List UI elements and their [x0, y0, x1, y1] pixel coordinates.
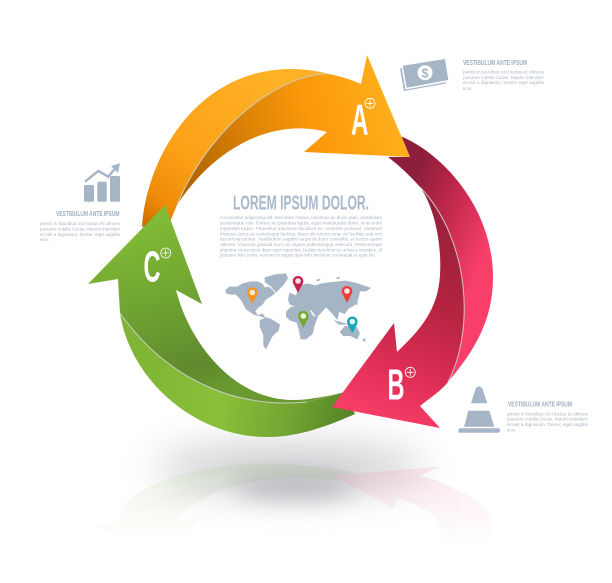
floor shadow	[155, 444, 425, 497]
center paragraph	[220, 215, 383, 258]
top right text block: primis in faucibus orci luctus et ultrices	[463, 69, 545, 74]
letter B with plus: B	[388, 360, 404, 409]
letter A with plus: A	[351, 95, 368, 144]
top right text block	[463, 58, 545, 91]
top right text block: VESTIBULUM ANTE IPSUM	[463, 58, 527, 67]
center paragraph: pharetra consectetur diam eget imperdiet. Nullam hendrerit ex ut lacus interdum, id	[220, 247, 382, 252]
infographic canvas	[40, 55, 588, 522]
bottom right text block: posuere cubilia Curae; Mauris interdum	[507, 416, 588, 422]
map pin A	[247, 287, 258, 304]
center paragraph: accumsan purus. Vestibulum sagittis turpis id dolor convallis, et luctus quam	[220, 237, 382, 242]
bottom right text block: et nisl a dignissim. Donec eget sagittis	[507, 422, 589, 427]
bottom right text block: VESTIBULUM ANTE IPSUM	[508, 400, 572, 409]
center paragraph: posuere felis porta. Aenean et augue quis felis tincidunt consequat ut eget leo.	[220, 253, 376, 258]
center paragraph: ultrices. Vivamus gravida nunc ac sapien pellentesque vehicula. Pellentesque	[220, 242, 383, 247]
title: LOREM IPSUM DOLOR.	[233, 192, 369, 214]
icon: traffic cone	[458, 386, 500, 433]
bottom right text block	[507, 400, 589, 432]
top right text block: posuere cubilia Curae; Mauris interdum	[463, 75, 544, 80]
arrow B: red	[332, 136, 493, 428]
left text block: posuere cubilia Curae; Mauris interdum	[40, 226, 120, 231]
left text block: et nisl a dignissim. Donec eget sagittis	[40, 232, 121, 237]
map pin B	[293, 276, 303, 293]
bottom right text block: primis in faucibus orci luctus et ultrices	[507, 412, 589, 416]
left text block	[40, 209, 121, 242]
center paragraph: imperdiet turpis. Phasellus maximus tincidunt ex, molestie pulvinar. Vivamus	[220, 226, 383, 231]
icon: money stack: $	[422, 66, 429, 80]
top right text block: eros.	[463, 86, 472, 91]
center paragraph: tristique, lacus ac scelerisque facilisis, libero elit rutrum urna, vel facilisis erat orci	[220, 231, 382, 236]
world map	[225, 273, 371, 349]
map pin D	[342, 286, 352, 303]
letter C with plus: C	[144, 242, 160, 291]
map pin E	[347, 317, 358, 333]
left text block: eros.	[40, 237, 49, 242]
center paragraph: consectetur adipiscing elit. Sed dolor massa, maximus ac dolor vitae, vestibulum	[220, 215, 382, 220]
map pin C	[298, 311, 309, 328]
icon: growth chart	[84, 163, 120, 202]
arrow C: green	[88, 205, 355, 437]
left text block: primis in faucibus orci luctus et ultrices	[40, 221, 121, 226]
arrow A: orange	[142, 55, 410, 227]
arrow reflection	[120, 463, 488, 516]
icon: money stack	[400, 59, 448, 91]
top right text block: et nisl a dignissim. Donec eget sagittis	[463, 80, 545, 85]
bottom right text block: eros.	[507, 428, 516, 432]
left text block: VESTIBULUM ANTE IPSUM	[56, 209, 120, 218]
center paragraph: scelerisque nisi. Donec ac pharetra ligula, eget malesuada dolor. In at enim	[220, 221, 382, 226]
